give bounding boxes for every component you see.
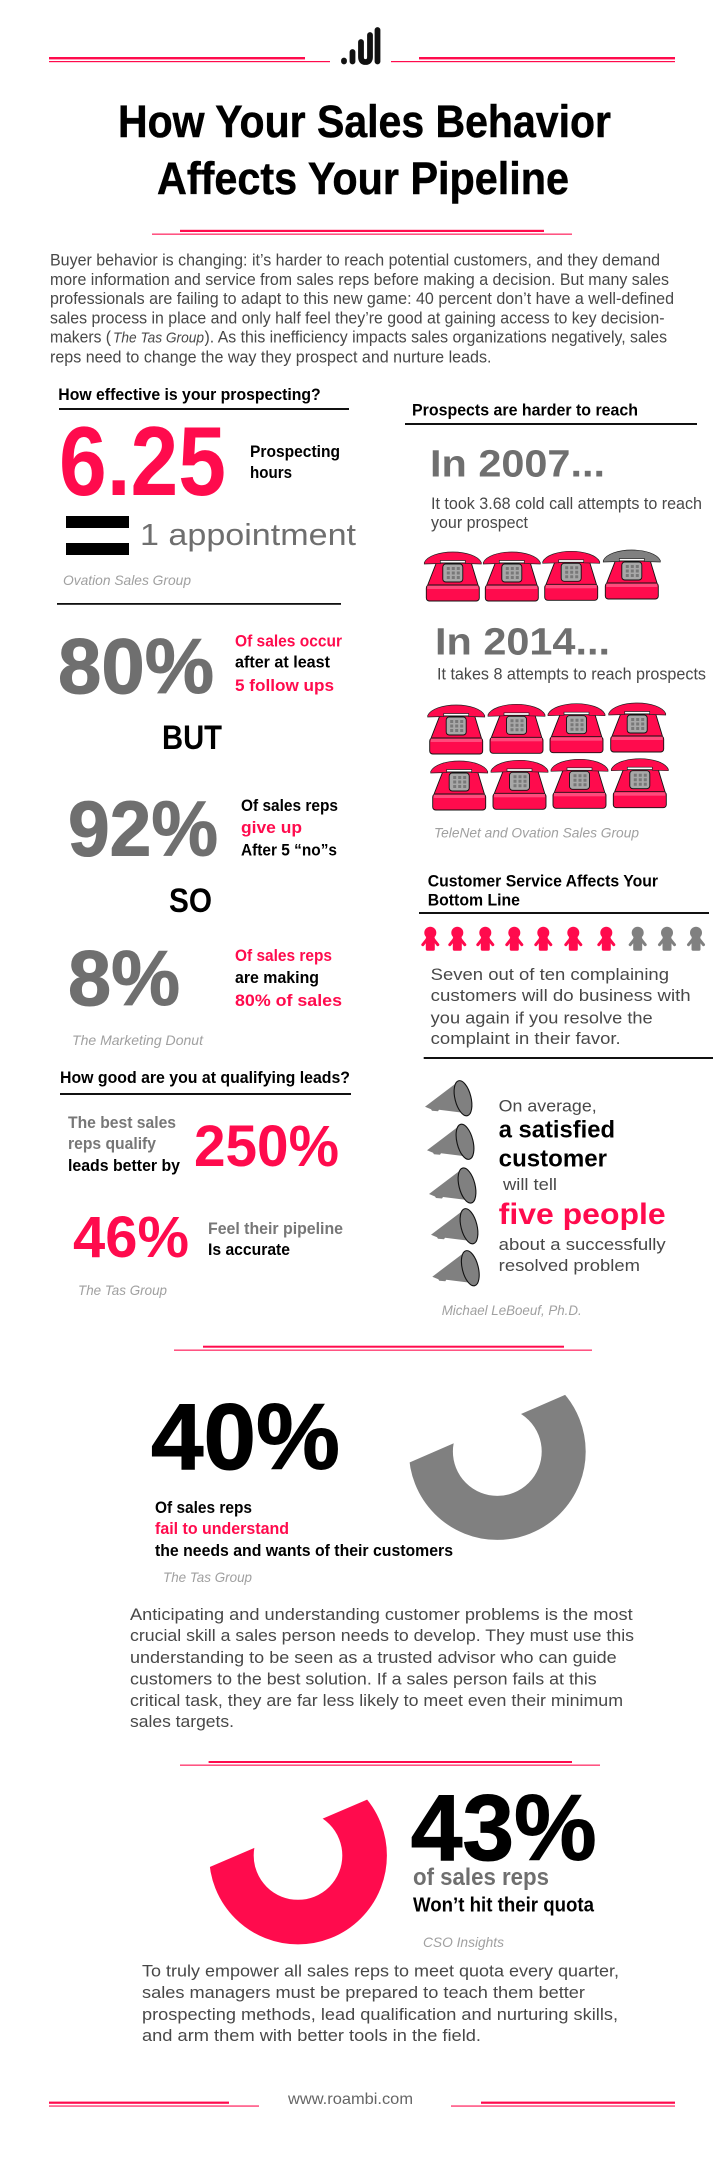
stat: 6.25 hours: 6.25 (59, 406, 226, 516)
text: satisfied customer tells five people: resolved problem (499, 1256, 640, 1275)
text: satisfied customer tells five people: will tell (502, 1175, 557, 1194)
title (118, 96, 611, 204)
stat: 40%: 40% (151, 1384, 340, 1489)
heading: prospects: Prospects are harder to reach (412, 402, 638, 420)
text: anticipating problems (130, 1605, 634, 1731)
text: give up: After 5 “no”s (241, 840, 337, 860)
text: satisfied customer tells five people: On average, (499, 1097, 597, 1116)
text: anticipating problems: customers to the best solution. If a sales person fails at this (130, 1669, 597, 1688)
text: of sales reps making: Of sales reps (235, 946, 332, 965)
text: fail to understand: Of sales reps (155, 1498, 252, 1517)
panel: 40 percent fail to understand (130, 1384, 634, 1731)
stat: 250%: 250% (194, 1114, 339, 1179)
intro paragraph: reps need to change the way they prospect and nurture leads. (50, 347, 492, 366)
text: empower reps: and arm them with better tools in the field. (142, 2026, 481, 2045)
text: best sales reps (68, 1113, 180, 1175)
text: best sales reps: reps qualify (68, 1134, 156, 1153)
chart: red donut (231, 1789, 365, 1922)
text: website: www.roambi.com (287, 2091, 413, 2108)
source: CSO Insights: CSO Insights (423, 1934, 504, 1950)
text: anticipating problems: critical task, they are far less likely to meet even their minimum (130, 1691, 623, 1710)
icon: equals sign (66, 516, 129, 555)
intro paragraph: sales process in place and only half feel they’re good at gaining access to key decision- (50, 308, 664, 327)
heading: customer service (428, 873, 659, 910)
chart: gray donut (431, 1385, 564, 1518)
word: BUT: BUT (162, 719, 222, 757)
label: prospecting hours (250, 442, 340, 482)
text: fail to understand: the needs and wants of their customers (155, 1541, 453, 1560)
stat: 8%: 8% (68, 934, 180, 1022)
text: best sales reps: The best sales (68, 1113, 176, 1132)
intro paragraph: The Tas Group (113, 329, 204, 346)
text: satisfied customer tells five people: a satisfied (499, 1117, 615, 1144)
heading: how effective: How effective is your prospecting? (58, 386, 321, 404)
heading: customer service: Customer Service Affects Your (428, 873, 659, 891)
text: 3.68 attempts: It took 3.68 cold call attempts to reach (431, 494, 702, 513)
panel: customer service (419, 873, 713, 1318)
source: Marketing Donut: The Marketing Donut (72, 1032, 204, 1048)
panel: 43 percent miss quota (142, 1775, 619, 2045)
icons: five megaphones (425, 1079, 482, 1288)
text: seven out of ten: you again if you resolve the (431, 1008, 653, 1027)
text: of sales occur: after at least (235, 652, 330, 672)
text: pipeline accurate (208, 1219, 343, 1259)
text: pipeline accurate: Feel their pipeline (208, 1219, 343, 1238)
text: of sales reps making: are making (235, 968, 319, 987)
word: SO: SO (169, 882, 212, 920)
text: 8 attempts: It takes 8 attempts to reach prospects (437, 664, 706, 683)
header rules and logo (49, 30, 675, 62)
text: of sales occur: Of sales occur (235, 632, 342, 650)
stat: 46%: 46% (73, 1205, 189, 1270)
panel: prospecting effectiveness (57, 386, 356, 1048)
text: give up: Of sales reps (241, 796, 338, 815)
text: won't hit quota: Won’t hit their quota (413, 1895, 595, 1917)
panel: prospects harder to reach (405, 402, 706, 841)
source: LeBoeuf: Michael LeBoeuf, Ph.D. (442, 1302, 582, 1318)
heading: In 2007: In 2007... (430, 444, 605, 486)
text: seven out of ten (431, 965, 691, 1048)
source: Ovation: Ovation Sales Group (63, 572, 191, 588)
text: anticipating problems: Anticipating and understanding customer problems is the most (130, 1605, 633, 1624)
icons: eight phones (428, 703, 668, 810)
heading: how good: How good are you at qualifying leads? (60, 1068, 350, 1087)
intro paragraph: more information and service from sales reps before making a decision. But many sales (50, 270, 669, 289)
source: Tas Group: The Tas Group (78, 1282, 167, 1298)
text: give up (241, 796, 338, 860)
text: empower reps (142, 1962, 619, 2045)
heading: In 2014: In 2014... (435, 622, 610, 664)
text: empower reps: prospecting methods, lead qualification and nurturing skills, (142, 2005, 618, 2024)
intro paragraph: professionals are failing to adapt to this new game: 40 percent don’t have a well-defined (50, 289, 674, 308)
intro paragraph: ). As this inefficiency impacts sales organizations negatively, sales (204, 327, 667, 346)
stat: 1 appointment: 1 appointment (140, 517, 356, 552)
text: empower reps: To truly empower all sales reps to meet quota every quarter, (142, 1962, 619, 1981)
text: satisfied customer tells five people: about a successfully (499, 1235, 666, 1254)
text: empower reps: sales managers must be prepared to teach them better (142, 1983, 585, 2002)
text: give up: give up (241, 818, 302, 837)
text: best sales reps: leads better by (68, 1156, 180, 1175)
label: prospecting hours: Prospecting (250, 442, 340, 461)
icons: ten people, seven red (423, 927, 704, 951)
text: pipeline accurate: Is accurate (208, 1240, 290, 1259)
panel: qualifying leads (60, 1068, 351, 1298)
text: anticipating problems: understanding to be seen as a trusted advisor who can guide (130, 1648, 617, 1667)
text: satisfied customer tells five people (499, 1097, 666, 1275)
text: anticipating problems: sales targets. (130, 1712, 234, 1731)
text: seven out of ten: customers will do business with (431, 986, 691, 1005)
text: seven out of ten: complaint in their favor. (431, 1029, 621, 1048)
text: of sales reps: of sales reps (413, 1864, 549, 1891)
heading: customer service: Bottom Line (428, 892, 520, 910)
label: prospecting hours: hours (250, 463, 292, 482)
text: fail to understand (155, 1498, 453, 1560)
stat: 92%: 92% (68, 784, 218, 872)
title: How Your Sales Behavior (118, 96, 611, 147)
text: 3.68 attempts: your prospect (431, 513, 528, 532)
text: of sales occur: 5 follow ups (235, 676, 334, 695)
text: of sales occur (235, 632, 342, 695)
text: of sales reps making (235, 946, 342, 1010)
intro paragraph: makers ( (50, 327, 111, 346)
source: TeleNet: TeleNet and Ovation Sales Group (434, 825, 639, 841)
intro paragraph: Buyer behavior is changing: it’s harder to reach potential customers, and they demand (50, 251, 660, 270)
text: satisfied customer tells five people: five people (499, 1198, 666, 1231)
text: seven out of ten: Seven out of ten complaining (431, 965, 669, 984)
intro paragraph (50, 251, 674, 366)
stat: 80%: 80% (58, 622, 214, 710)
icon: roambi bars logo (344, 30, 378, 62)
text: satisfied customer tells five people: customer (499, 1146, 607, 1173)
text: fail to understand: fail to understand (155, 1519, 289, 1538)
icons: four phones (424, 550, 660, 601)
source: Tas Group: The Tas Group (163, 1569, 252, 1585)
stat: 43%: 43% (411, 1775, 597, 1880)
text: 3.68 attempts (431, 494, 702, 532)
title: Affects Your Pipeline (157, 153, 569, 204)
text: of sales reps making: 80% of sales (235, 991, 342, 1010)
text: anticipating problems: crucial skill a sales person needs to develop. They must use this (130, 1626, 634, 1645)
